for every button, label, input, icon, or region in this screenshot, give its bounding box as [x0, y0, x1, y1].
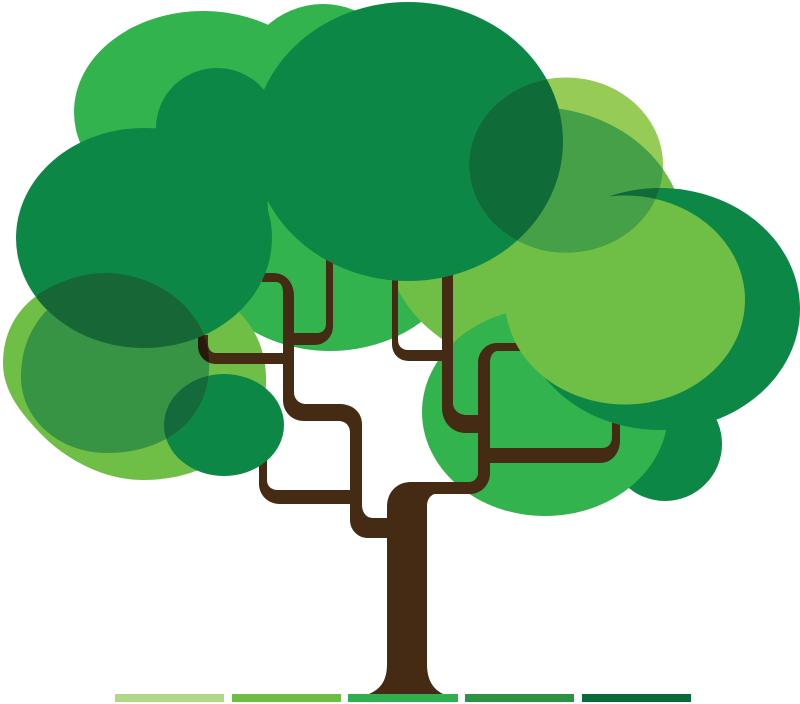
- trunk and branches: [198, 258, 620, 694]
- branch: right main: [420, 343, 525, 494]
- canopy: translucent circle right: [469, 78, 663, 252]
- trunk: [369, 482, 443, 694]
- canopy: centre bright foliage: [195, 129, 465, 351]
- legend colour bars: [115, 694, 691, 702]
- canopy: left large dark ellipse: [16, 90, 272, 348]
- canopy: small dark circle lower right: [608, 387, 722, 501]
- canopy: small dark circle lower left: [164, 374, 284, 476]
- branch: centre small: [392, 270, 443, 361]
- branch: lower left main: [262, 273, 390, 538]
- branch: lower far left: [259, 455, 351, 504]
- canopy: right light ellipse: [505, 196, 745, 404]
- branch: upper centre left: [293, 258, 333, 345]
- canopy: right dark crescent: [520, 188, 800, 430]
- branch: far left: [198, 335, 285, 364]
- canopy: dark overlap on left ellipse: [36, 273, 204, 348]
- branch: lower right: [489, 415, 620, 463]
- canopy: translucent ellipse left: [21, 273, 210, 453]
- canopy: top centre dark ellipse: [253, 2, 563, 281]
- canopy: left light foliage: [3, 282, 266, 480]
- canopy: top-left bright foliage: [74, 4, 406, 213]
- canopy: right light foliage: [385, 107, 685, 367]
- canopy: bright circle lower right: [422, 308, 668, 516]
- branch: centre right tall: [442, 268, 479, 433]
